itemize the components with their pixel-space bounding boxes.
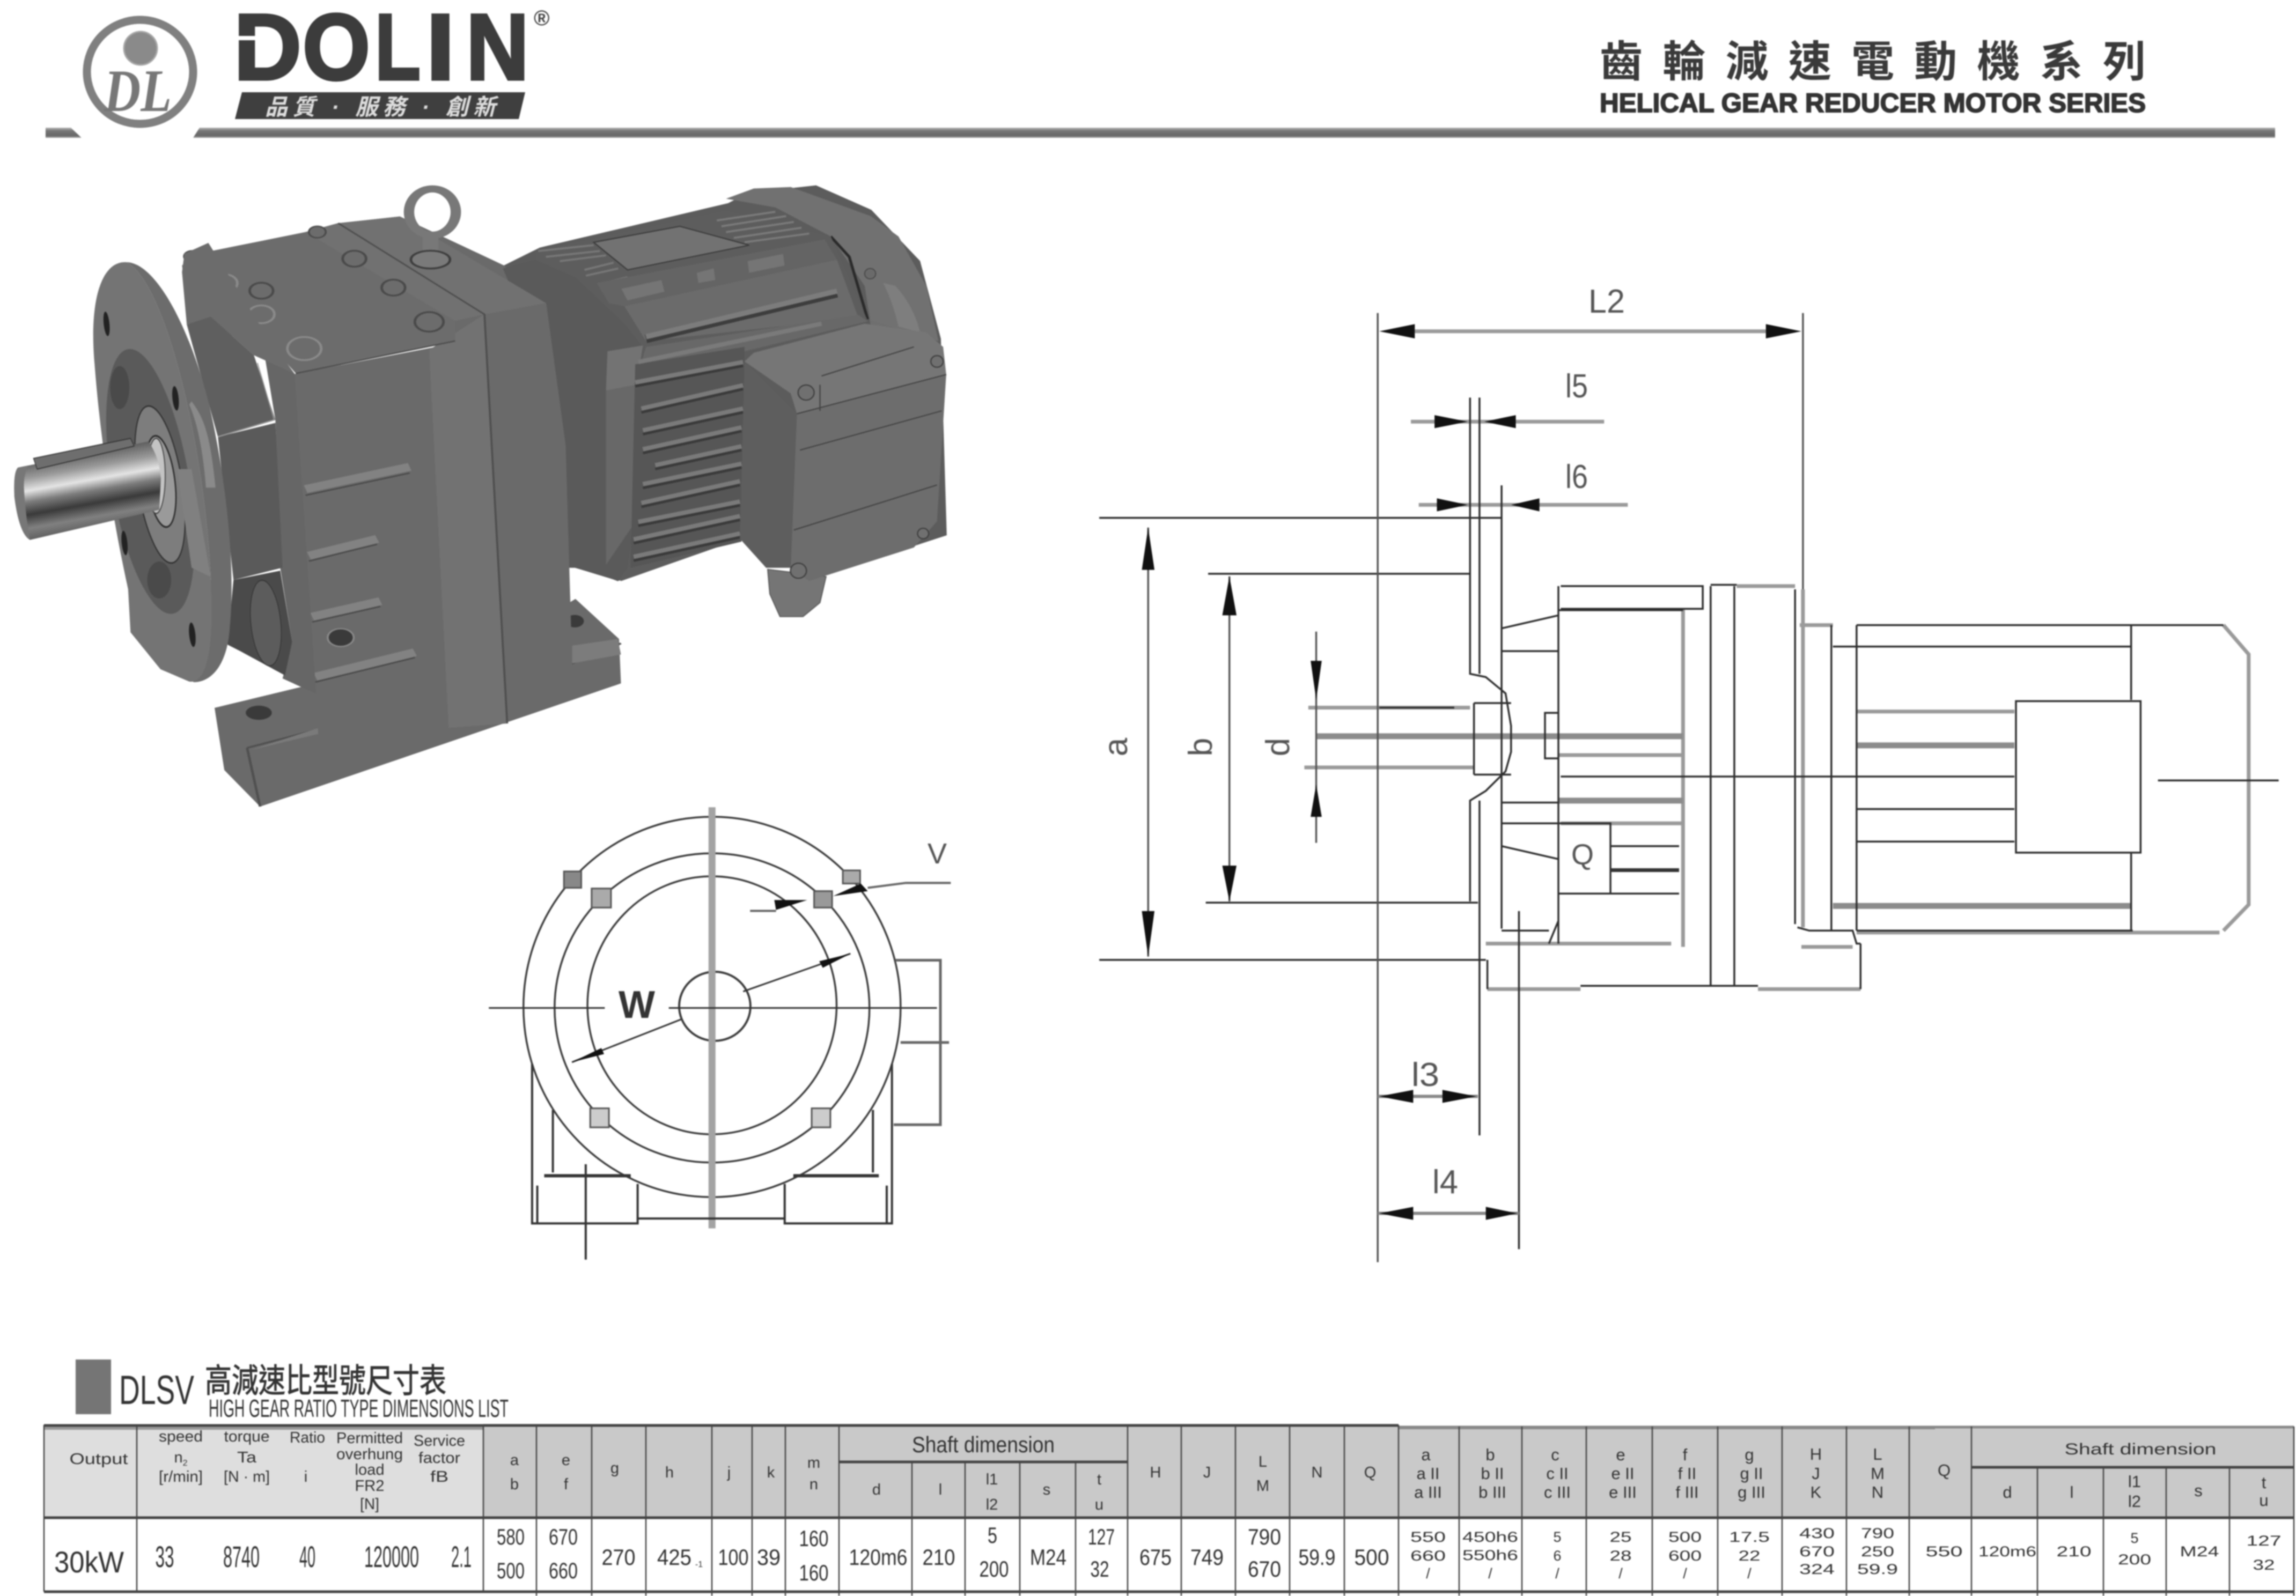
middle group data: 500 [1354, 1545, 1389, 1570]
gray thick outlines [1304, 331, 2249, 989]
middle group column headers: e [562, 1452, 570, 1469]
right group data: 550h6 [1462, 1547, 1518, 1563]
right group column headers: Shaft dimension [2064, 1440, 2217, 1458]
base plates [544, 1174, 879, 1177]
performance data: 120000 [364, 1540, 419, 1573]
label d rotated: d [1260, 738, 1297, 756]
motor assembly [503, 187, 946, 617]
middle group data: 100 [718, 1545, 749, 1570]
housing side blocks [182, 243, 316, 694]
brand name [234, 0, 529, 100]
label l3: l3 [1411, 1056, 1439, 1093]
right group column headers: l2 [2128, 1492, 2141, 1511]
middle group data: 790 [1248, 1524, 1281, 1549]
middle group data: 39 [757, 1545, 781, 1570]
right group column headers: c II [1546, 1464, 1569, 1483]
left group column headers: Service [414, 1432, 465, 1450]
side terminal box [894, 960, 949, 1125]
right group column headers: J [1812, 1464, 1820, 1483]
table header backgrounds [44, 1424, 2294, 1518]
right group column headers: f III [1675, 1483, 1699, 1502]
middle group column headers [510, 1432, 1376, 1513]
notch in D [238, 36, 260, 40]
series title English: HELICAL GEAR REDUCER MOTOR SERIES [1600, 88, 2146, 118]
middle group column headers: Shaft dimension [912, 1432, 1055, 1457]
right group column headers: L [1873, 1445, 1882, 1464]
middle group column headers: a [510, 1452, 519, 1469]
front view technical drawing [489, 807, 951, 1260]
gear housing and foot [182, 189, 621, 807]
middle group column headers: n [810, 1476, 818, 1493]
left group column headers: FR2 [355, 1477, 384, 1495]
right group data: 550 [1926, 1543, 1962, 1560]
middle group data: M24 [1030, 1545, 1066, 1570]
right group data: 790 [1861, 1525, 1894, 1541]
left group column headers: torque [224, 1428, 269, 1445]
base feet [532, 1064, 892, 1260]
middle group data: 675 [1139, 1545, 1172, 1570]
middle group column headers: l1 [986, 1471, 998, 1488]
left group column headers: factor [418, 1450, 460, 1467]
cable gland [768, 570, 826, 617]
middle group data: 32 [1090, 1556, 1109, 1582]
right group column headers: a III [1414, 1483, 1442, 1502]
middle group data: 120m6 [849, 1545, 908, 1570]
series title Chinese: 齒輪減速電動機系列 [1600, 38, 2146, 86]
right group column headers: b II [1481, 1464, 1504, 1483]
middle group data: 670 [549, 1524, 578, 1549]
extension lines [1148, 313, 1803, 1262]
right group column headers: g II [1740, 1464, 1763, 1483]
heading Chinese: 高減速比型號尺寸表 [205, 1363, 446, 1400]
middle group data: 670 [1248, 1556, 1281, 1582]
right group data: 324 [1799, 1561, 1835, 1577]
right group data: 500 [1668, 1529, 1702, 1545]
right group data: 670 [1799, 1543, 1835, 1560]
right group data: 210 [2057, 1543, 2091, 1560]
middle group data: 160 [799, 1560, 828, 1585]
lifting eye bolt [409, 189, 456, 269]
left group column headers: [N] [360, 1496, 379, 1513]
left group column headers: fB [430, 1468, 448, 1486]
registered mark: ® [534, 6, 549, 30]
right group data: 17.5 [1729, 1529, 1770, 1545]
middle group column headers: k [767, 1464, 775, 1481]
right group data: / [1488, 1565, 1492, 1582]
right group column headers: K [1811, 1483, 1822, 1502]
right group data: 430 [1799, 1525, 1835, 1541]
header rule [46, 128, 2275, 138]
dimension labels [1098, 283, 1625, 1201]
right group data: / [1555, 1565, 1559, 1582]
right group data: 28 [1609, 1548, 1632, 1564]
right group data: M24 [2180, 1543, 2219, 1560]
right group column headers: l1 [2128, 1472, 2141, 1491]
performance data: 8740 [223, 1540, 260, 1573]
middle group column headers: m [807, 1454, 820, 1472]
output shaft [14, 438, 165, 540]
label V: V [928, 838, 947, 870]
middle group data [497, 1523, 1389, 1585]
right group data: 6 [1553, 1548, 1562, 1564]
right group data: / [1618, 1565, 1623, 1582]
middle group data: 210 [923, 1545, 955, 1570]
right group column headers: s [2194, 1481, 2203, 1500]
right group column headers: e II [1611, 1464, 1635, 1483]
motor bell housing [503, 260, 643, 581]
right group column headers: b III [1478, 1483, 1506, 1502]
right group column headers: d [2003, 1483, 2012, 1502]
middle group data: -1 [695, 1560, 703, 1569]
middle group column headers: j [727, 1464, 731, 1481]
right group data: 250 [1861, 1543, 1894, 1560]
mounting foot [215, 599, 621, 807]
right group data: / [1426, 1565, 1430, 1582]
right group data: 450h6 [1462, 1529, 1518, 1545]
logo emblem [87, 20, 193, 124]
middle group column headers: t [1097, 1471, 1101, 1488]
hole diameter V dimension [750, 883, 951, 911]
middle group data: 160 [799, 1526, 828, 1551]
label W: W [619, 984, 655, 1026]
right group column headers: g [1745, 1445, 1754, 1464]
middle group column headers: u [1095, 1496, 1103, 1513]
right group column headers: a [1421, 1445, 1431, 1464]
middle group column headers: g [610, 1460, 619, 1477]
motor cooling fins [631, 324, 821, 568]
middle group column headers: d [872, 1481, 881, 1498]
right group column headers: e [1616, 1445, 1625, 1464]
middle group data: 270 [602, 1545, 635, 1570]
middle group data: 660 [549, 1558, 578, 1583]
right group data: 22 [1738, 1548, 1761, 1564]
right group data: 600 [1668, 1548, 1702, 1564]
horizontal centre line [489, 1007, 937, 1009]
middle group column headers: l2 [986, 1496, 998, 1513]
dimension arrowheads [1142, 324, 1801, 1220]
right group column headers: f [1683, 1445, 1688, 1464]
label L2: L2 [1588, 283, 1625, 320]
heading English: HIGH GEAR RATIO TYPE DIMENSIONS LIST [209, 1394, 509, 1422]
wide gray fins [1316, 736, 2131, 906]
right group data: 5 [1553, 1529, 1562, 1545]
motor body [535, 210, 868, 581]
right group data: 120m6 [1978, 1543, 2036, 1560]
right group column headers [1414, 1440, 2269, 1511]
model code: DLSV [119, 1368, 194, 1413]
diameter W dimension [572, 954, 850, 1062]
right group data [1410, 1525, 2281, 1582]
left group column headers: Permitted [336, 1430, 403, 1447]
right group data: 32 [2253, 1557, 2275, 1573]
header band [46, 0, 2275, 138]
middle group column headers: f [564, 1476, 569, 1493]
right group data: 200 [2118, 1551, 2151, 1568]
left group column headers: i [304, 1468, 307, 1486]
left group column headers: Ta [237, 1449, 257, 1466]
label l6: l6 [1565, 459, 1588, 496]
section heading [76, 1359, 509, 1422]
left group column headers: Ratio [290, 1429, 325, 1446]
middle group column headers: J [1203, 1464, 1211, 1481]
output power cell: 30kW [54, 1545, 124, 1579]
vertical centre line [709, 807, 716, 1228]
dimension L3 and L4 lines [1378, 1096, 1519, 1214]
middle group column headers: h [665, 1464, 674, 1481]
motor fan cover [726, 187, 939, 341]
right group column headers: g III [1738, 1483, 1765, 1502]
middle group data: 500 [497, 1558, 525, 1583]
middle group data: 580 [497, 1524, 525, 1549]
middle group column headers: N [1312, 1464, 1322, 1481]
terminal box [740, 324, 946, 581]
slogan bar: 品質 · 服務 · 創新 [265, 94, 499, 120]
middle group data: 200 [980, 1556, 1009, 1582]
right group column headers: u [2259, 1491, 2269, 1510]
middle group data: 425 [657, 1545, 691, 1570]
label l4: l4 [1432, 1164, 1458, 1201]
left group column headers: speed [159, 1428, 203, 1445]
middle group column headers: s [1043, 1481, 1050, 1498]
label b rotated: b [1182, 738, 1219, 756]
left group column headers: load [355, 1461, 384, 1479]
left group column headers: [r/min] [159, 1468, 203, 1486]
right group data: 5 [2130, 1530, 2139, 1546]
middle group column headers: b [510, 1476, 519, 1493]
middle group column headers: Q [1364, 1464, 1376, 1481]
label Q: Q [1571, 839, 1594, 871]
middle group data: 749 [1190, 1545, 1224, 1570]
middle group column headers: M [1256, 1477, 1269, 1495]
silhouette fill [306, 186, 947, 581]
left group column headers: [N · m] [224, 1468, 270, 1486]
side view technical drawing [1099, 313, 2279, 1262]
right group data: 59.9 [1857, 1561, 1898, 1577]
right group data: 660 [1410, 1548, 1446, 1564]
performance data [156, 1540, 472, 1573]
right group data: / [1683, 1565, 1687, 1582]
middle group data: 127 [1088, 1524, 1115, 1549]
table rules [44, 1425, 2294, 1596]
right group column headers: f II [1678, 1464, 1696, 1483]
right group column headers: c III [1544, 1483, 1571, 1502]
right group column headers: e III [1609, 1483, 1637, 1502]
right group data: 25 [1609, 1529, 1632, 1545]
bolt holes [564, 870, 860, 1127]
middle group data: 5 [988, 1523, 997, 1548]
middle group data: 59.9 [1298, 1545, 1336, 1570]
middle group column headers: H [1150, 1464, 1161, 1481]
flange circles [524, 817, 901, 1197]
performance data: 40 [299, 1540, 315, 1573]
left group column headers: Output [70, 1451, 128, 1468]
dimensions table: 2.1 [451, 1540, 472, 1573]
left group column headers: 2 [183, 1459, 188, 1468]
right group column headers: a II [1416, 1464, 1440, 1483]
right group data: 127 [2247, 1533, 2281, 1549]
dark outlines [1099, 397, 2279, 1249]
label a rotated: a [1098, 737, 1135, 756]
middle group column headers: l [939, 1481, 942, 1498]
left group column headers: overhung [336, 1446, 403, 1463]
heading marker [76, 1359, 111, 1414]
right group column headers: c [1551, 1445, 1559, 1464]
thick fin [1610, 868, 1679, 872]
output flange [90, 262, 232, 682]
right group data: 550 [1410, 1529, 1446, 1545]
gear housing [182, 217, 572, 739]
right group column headers: t [2262, 1473, 2266, 1492]
left group column headers [70, 1428, 465, 1513]
dimensions table [44, 1424, 2294, 1596]
performance data: 33 [156, 1540, 174, 1573]
flange and shaft [14, 243, 316, 694]
right group column headers: H [1810, 1445, 1822, 1464]
right group data: / [1747, 1565, 1752, 1582]
logo emblem: DL [104, 58, 172, 124]
right group column headers: N [1872, 1483, 1883, 1502]
right group column headers: b [1485, 1445, 1495, 1464]
middle group column headers: L [1259, 1453, 1267, 1471]
label l5: l5 [1565, 368, 1588, 405]
right group column headers: l [2070, 1483, 2073, 1502]
right group column headers: Q [1938, 1461, 1951, 1480]
right group column headers: M [1871, 1464, 1885, 1483]
left group column headers: n [174, 1449, 183, 1466]
product photo: geared motor [14, 186, 947, 807]
